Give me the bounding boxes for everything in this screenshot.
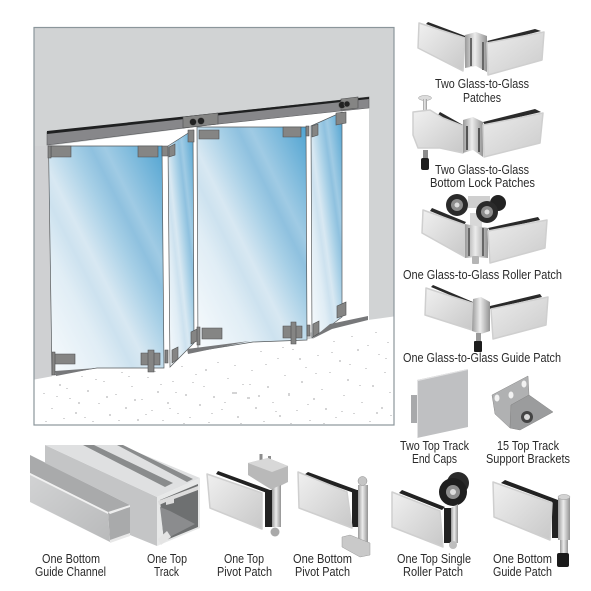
caption: top track: Track [154,565,180,579]
top track dark edge [47,97,369,134]
caption: support brackets: Support Brackets [486,452,570,466]
caption: bottom guide channel: Guide Channel [35,565,106,579]
product: track end cap [411,369,468,438]
caption: bottom pivot patch: Pivot Patch [295,565,350,579]
caption: top pivot patch: One Top [224,552,264,566]
glass panel 4 [311,112,342,338]
floor speckle [44,332,391,424]
caption: bottom pivot patch: One Bottom [293,552,352,566]
caption: bottom guide patch [493,552,552,579]
caption: top single roller patch [397,552,471,579]
product: bottom guide channel [30,455,130,543]
caption: top track [147,552,187,579]
caption: end caps: End Caps [412,452,457,466]
product: top single roller patch [392,472,469,549]
caption: end caps [400,439,470,466]
caption: support brackets [486,439,570,466]
caption: end caps: Two Top Track [400,439,470,453]
glass panel 1 [48,146,164,375]
caption: bottom pivot patch [293,552,352,579]
caption: bottom lock patches [430,163,535,190]
caption: two glass-to-glass patches: Patches [463,91,501,105]
product: top pivot patch [207,454,288,536]
opening [48,105,369,380]
caption: top pivot patch: Pivot Patch [217,565,272,579]
wall background [34,28,394,425]
caption: top single roller patch: One Top Single [397,552,471,566]
caption: top pivot patch [217,552,272,579]
caption: support brackets: 15 Top Track [497,439,560,453]
caption: top track: One Top [147,552,187,566]
caption: top single roller patch: Roller Patch [403,565,463,579]
glass panel 2 [168,130,194,367]
caption: bottom lock patches: Bottom Lock Patches [430,176,535,190]
product: support bracket [492,376,553,430]
top track [47,97,369,145]
top hardware [48,97,358,158]
panel border [34,28,394,425]
product: two glass-to-glass patches [418,22,544,75]
product: bottom lock patches [413,96,543,170]
caption: bottom guide patch: Guide Patch [493,565,552,579]
caption: bottom guide channel: One Bottom [42,552,100,566]
product: top track [45,445,200,546]
panel: door illustration [34,28,394,425]
caption: bottom guide patch: One Bottom [493,552,552,566]
glass panel 3 [197,127,307,351]
product: roller patch [422,194,547,264]
carriage rollers [190,101,350,126]
product: bottom pivot patch [298,472,370,557]
bottom hardware [52,302,346,375]
left wall return [34,146,52,380]
caption: roller patch: One Glass-to-Glass Roller Patch [403,268,562,282]
floor [34,316,394,425]
product: bottom guide patch [493,480,570,567]
caption: two glass-to-glass patches: Two Glass-to-Glass [435,77,529,91]
floor channel [55,316,368,376]
caption: bottom lock patches: Two Glass-to-Glass [435,163,529,177]
product: guide patch [425,285,548,352]
caption: bottom guide channel [35,552,106,579]
caption: two glass-to-glass patches [435,77,529,105]
caption: guide patch: One Glass-to-Glass Guide Patch [403,351,561,365]
